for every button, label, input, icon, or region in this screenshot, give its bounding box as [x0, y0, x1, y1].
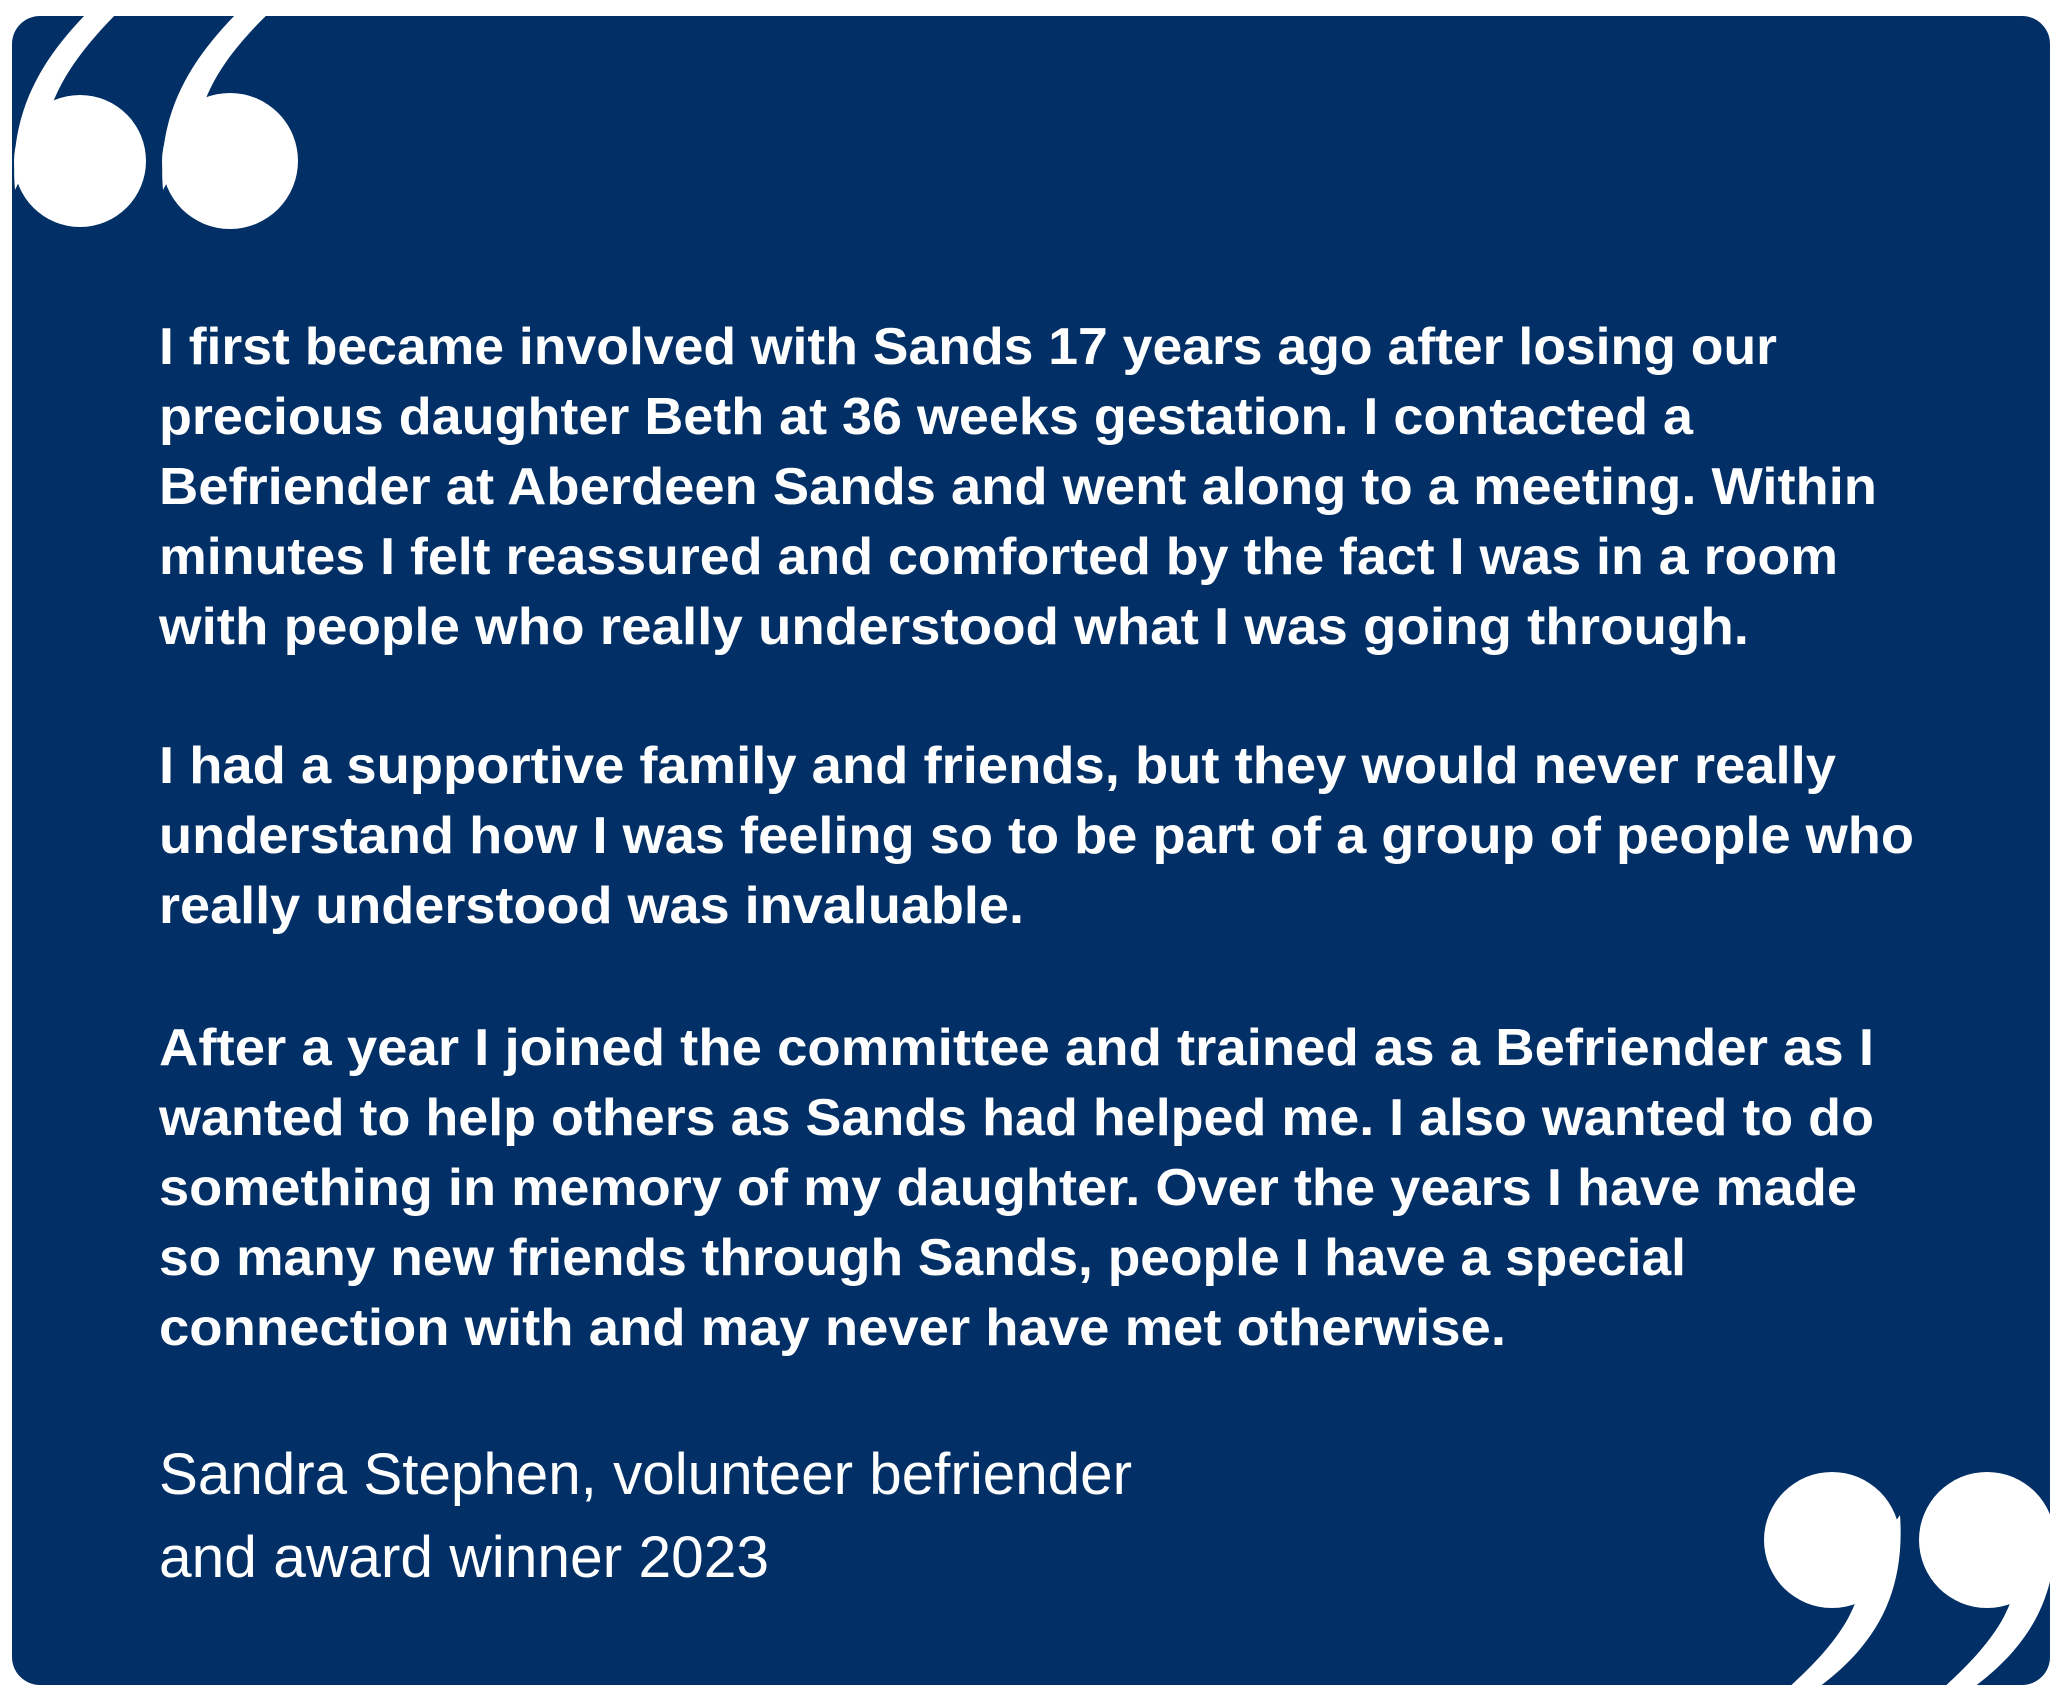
- icon: opening quotation mark: [14, 10, 298, 229]
- text block: testimonial: I had a supportive family and friends, but they would never really: [159, 737, 1836, 795]
- text block: testimonial: something in memory of my daughter. Over the years I have made: [159, 1159, 1857, 1217]
- attribution: Sandra Stephen, volunteer befriender: [159, 1442, 1132, 1507]
- text block: testimonial: precious daughter Beth at 36 weeks gestation. I contacted a: [159, 388, 1694, 446]
- text block: testimonial: After a year I joined the committee and trained as a Befriender as I: [159, 1019, 1874, 1077]
- icon: closing quotation mark: [1764, 1472, 2056, 1690]
- text block: testimonial: connection with and may never have met otherwise.: [159, 1299, 1506, 1357]
- text block: testimonial: really understood was invaluable.: [159, 877, 1024, 935]
- text block: testimonial: [158, 318, 1914, 1357]
- text block: testimonial: I first became involved with Sands 17 years ago after losing our: [159, 318, 1777, 376]
- attribution: [159, 1442, 1132, 1590]
- text block: testimonial: Befriender at Aberdeen Sands and went along to a meeting. Within: [159, 458, 1877, 516]
- text block: testimonial: minutes I felt reassured and comforted by the fact I was in a room: [159, 528, 1838, 586]
- attribution: and award winner 2023: [159, 1525, 769, 1590]
- text block: testimonial: wanted to help others as Sands had helped me. I also wanted to do: [158, 1089, 1874, 1147]
- text block: testimonial: understand how I was feeling so to be part of a group of people who: [159, 807, 1914, 865]
- text block: testimonial: so many new friends through Sands, people I have a special: [159, 1229, 1686, 1287]
- text block: testimonial: with people who really understood what I was going through.: [158, 598, 1749, 656]
